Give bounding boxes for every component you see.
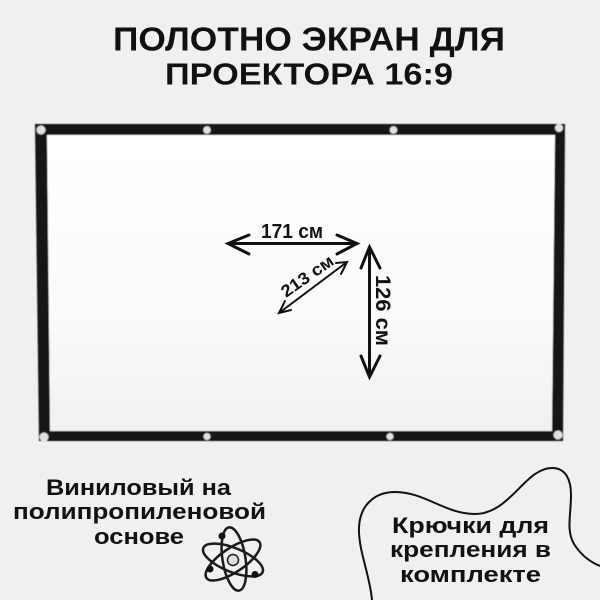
text: hooks included: крепления в	[390, 537, 551, 562]
label: diagonal: 213 см	[277, 251, 337, 301]
screen canvas	[47, 135, 555, 431]
text: material: Виниловый на	[46, 475, 232, 500]
callout outline: hooks	[359, 468, 600, 600]
arrow: width	[228, 235, 357, 254]
black border	[35, 124, 565, 441]
label: height: 126 см	[371, 275, 394, 346]
title: ПРОЕКТОРА 16:9	[165, 56, 453, 92]
arrow: diagonal	[279, 262, 347, 313]
text: material: основе	[94, 524, 184, 549]
text: hooks included: Крючки для	[392, 513, 549, 538]
icon: atom	[199, 526, 267, 592]
projector screen	[35, 124, 565, 442]
text: material	[13, 475, 266, 549]
mounting eyelets	[36, 124, 563, 442]
text: material: полипропиленовой	[13, 499, 266, 524]
text: hooks included	[390, 513, 551, 587]
title: ПОЛОТНО ЭКРАН ДЛЯ	[113, 20, 505, 58]
arrow: height	[361, 247, 380, 377]
label: width: 171 см	[261, 221, 323, 243]
title	[113, 20, 505, 92]
text: hooks included: комплекте	[400, 562, 541, 587]
